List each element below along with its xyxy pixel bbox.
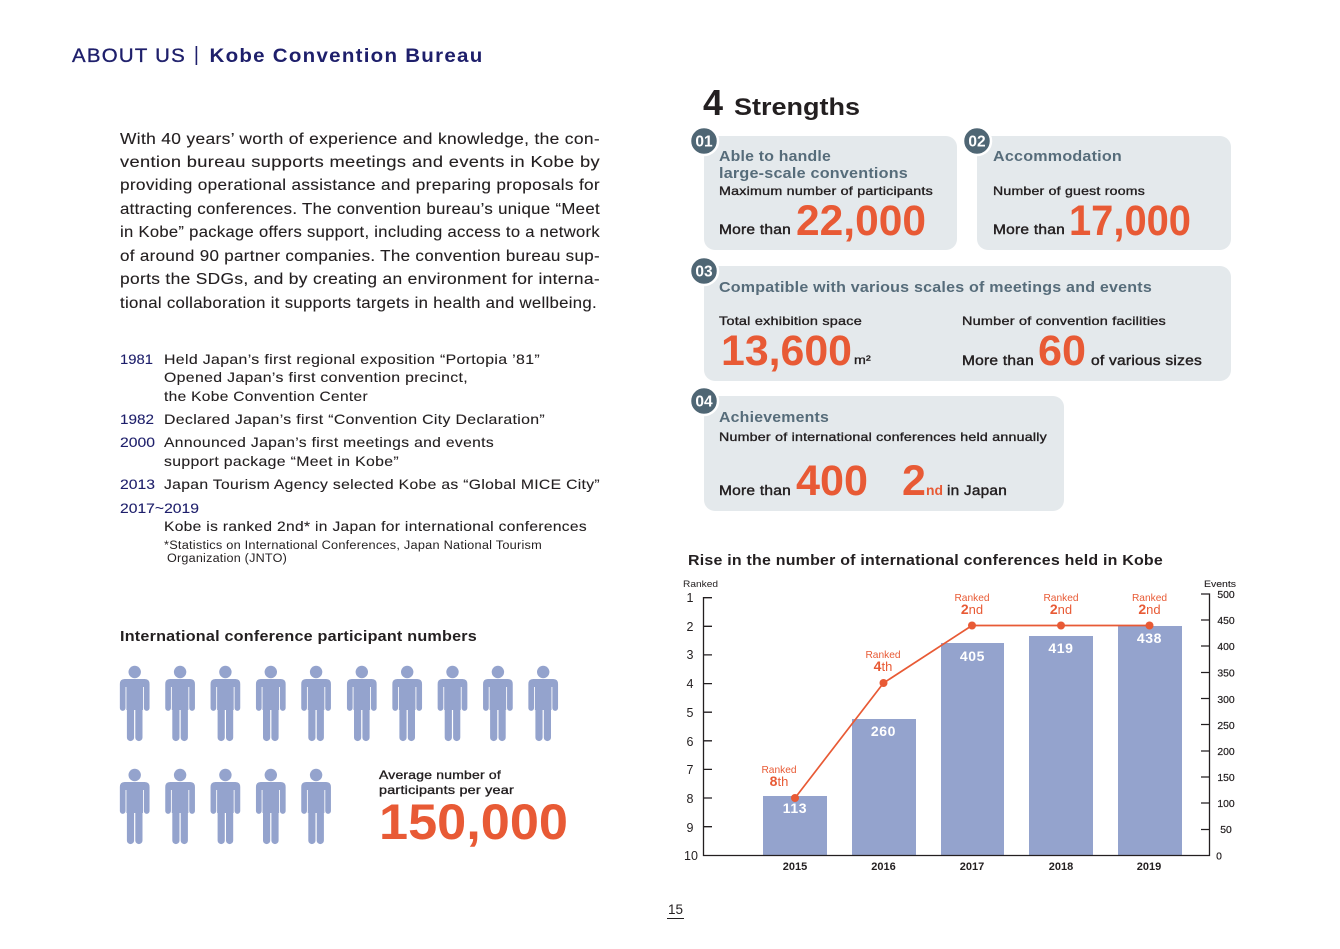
year labels: 2017: [960, 861, 984, 873]
left axis labels: 8: [687, 792, 694, 806]
left axis labels: 9: [687, 821, 694, 835]
left axis labels: 2: [687, 620, 694, 634]
left axis labels: 3: [687, 648, 694, 662]
left axis labels: 7: [687, 763, 694, 777]
right axis labels: 350: [1217, 668, 1235, 680]
timeline: 1982: [120, 411, 154, 427]
text block: introduction: attracting conferences. The convention bureau’s unique “Meet: [120, 201, 600, 218]
heading: 4 Strengths: Strengths: [734, 94, 860, 121]
heading: 4 Strengths: 4: [703, 82, 723, 123]
right axis labels: 150: [1217, 773, 1235, 784]
rank labels: 2nd: [1138, 601, 1161, 617]
title: [72, 45, 484, 67]
bar values: 419: [1048, 640, 1074, 656]
timeline: Kobe is ranked 2nd* in Japan for international conferences: [164, 518, 587, 534]
timeline: 1981: [120, 351, 153, 367]
panel: strength 03: 13,600: [721, 327, 852, 375]
year labels: 2015: [783, 861, 807, 873]
left axis labels: 5: [687, 706, 694, 720]
timeline: Japan Tourism Agency selected Kobe as “Global MICE City”: [164, 476, 600, 492]
right axis labels: 200: [1217, 747, 1235, 758]
rank line: [791, 622, 1154, 802]
panel: strength 03: Compatible with various scales of meetings and events: [719, 280, 1152, 296]
panel: strength 03: Number of convention facilities: [962, 314, 1166, 328]
rank labels: 2nd: [1050, 601, 1072, 617]
year labels: 2019: [1137, 861, 1161, 873]
right axis labels: 400: [1217, 642, 1235, 653]
panel: strength 02: 17,000: [1069, 197, 1191, 245]
bar chart: international conferences: [683, 578, 1236, 873]
right axis labels: 450: [1217, 616, 1235, 627]
timeline: 2013: [120, 476, 155, 492]
text block: introduction: With 40 years’ worth of experience and knowledge, the con-: [120, 131, 600, 148]
panel: strength 03: m²: [854, 353, 871, 367]
panel: strength 04: 04: [695, 394, 713, 410]
panel: strength 02: Number of guest rooms: [993, 184, 1145, 198]
timeline: the Kobe Convention Center: [164, 388, 368, 404]
rank labels: Ranked: [1043, 593, 1079, 604]
panel: strength 01: Able to handle: [719, 149, 831, 165]
panel: strength 01: More than: [719, 222, 791, 237]
panel: strength 04: 2: [902, 457, 926, 505]
year labels: 2016: [871, 861, 896, 873]
timeline: Held Japan’s first regional exposition “Portopia ’81”: [164, 351, 540, 367]
timeline: [120, 351, 600, 565]
timeline: *Statistics on International Conferences, Japan National Tourism: [164, 540, 542, 552]
timeline: Announced Japan’s first meetings and events: [164, 434, 494, 450]
timeline: 2017~2019: [120, 500, 199, 516]
panel: strength 04: Achievements: [719, 410, 829, 426]
bar values: 113: [783, 800, 807, 816]
right axis labels: 300: [1217, 695, 1235, 706]
left axis labels: 6: [687, 735, 694, 749]
text block: introduction: in Kobe” package offers support, including access to a network: [120, 224, 600, 241]
bar values: 405: [960, 648, 985, 664]
right axis labels: Events: [1204, 578, 1236, 589]
panel: strength 01: 01: [695, 134, 713, 150]
panel: strength 01: 22,000: [796, 197, 926, 245]
pictogram: people row 2: [120, 769, 331, 844]
year labels: [783, 861, 1161, 873]
bar values: [783, 630, 1162, 816]
rank labels: 2nd: [961, 601, 983, 617]
panel: strength 04: More than: [719, 483, 791, 498]
panel: strength 04: 400: [796, 457, 868, 505]
rank labels: Ranked: [954, 593, 990, 604]
title: Kobe Convention Bureau: [210, 45, 484, 67]
panel: strength 03: 03: [695, 264, 713, 280]
callout: average participants: [379, 768, 568, 850]
panel: strength 03: Total exhibition space: [719, 314, 862, 328]
callout: average participants: participants per year: [379, 783, 514, 797]
title: ABOUT US: [72, 45, 186, 67]
text block: introduction: tional collaboration it supports targets in health and wellbeing.: [120, 295, 597, 312]
year labels: 2018: [1049, 861, 1073, 873]
panel: strength 03: More than: [962, 353, 1034, 368]
rank labels: Ranked: [761, 765, 797, 776]
panel: strength 03: of various sizes: [1091, 353, 1202, 368]
right axis labels: 100: [1217, 799, 1235, 810]
bar values: 438: [1137, 630, 1162, 646]
panel: strength 01: Maximum number of participants: [719, 184, 933, 198]
panel: strength 03: 60: [1038, 327, 1086, 375]
timeline: Organization (JNTO): [167, 553, 287, 565]
timeline: 2000: [120, 434, 155, 450]
heading: chart title: Rise in the number of international conferences held in Kobe: [688, 553, 1163, 569]
left axis labels: [683, 578, 718, 863]
text block: introduction: [120, 131, 600, 312]
rank labels: 8th: [770, 773, 788, 789]
right axis labels: [1204, 578, 1236, 862]
right axis labels: 250: [1217, 721, 1235, 732]
right axis labels: 50: [1220, 825, 1232, 836]
rank labels: [761, 593, 1167, 789]
left axis labels: 4: [687, 677, 694, 691]
left axis labels: Ranked: [683, 578, 718, 589]
bars: [763, 626, 1182, 856]
panel: strength 01: [690, 127, 957, 250]
heading: 4 Strengths: [703, 82, 860, 123]
panel: strength 04: nd: [926, 483, 943, 498]
callout: average participants: Average number of: [379, 768, 502, 782]
heading: participant numbers: International conference participant numbers: [120, 629, 477, 645]
panel: strength 02: 02: [968, 134, 986, 150]
page number: 15: [668, 902, 683, 917]
right axis labels: 0: [1216, 852, 1222, 862]
axes: [704, 594, 1210, 856]
right axis labels: 500: [1217, 590, 1235, 601]
text block: introduction: of around 90 partner companies. The convention bureau sup-: [120, 248, 600, 265]
panel: strength 03: [690, 257, 1231, 381]
panel: strength 02: Accommodation: [993, 149, 1122, 165]
text block: introduction: vention bureau supports meetings and events in Kobe by: [120, 154, 600, 171]
panel: strength 02: [963, 127, 1231, 250]
bar values: 260: [871, 723, 896, 739]
callout: average participants: 150,000: [379, 794, 568, 850]
panel: strength 04: Number of international conferences held annually: [719, 430, 1047, 444]
panel: strength 02: More than: [993, 222, 1065, 237]
panel: strength 04: in Japan: [947, 483, 1007, 498]
panel: strength 04: [690, 387, 1064, 511]
left axis labels: 10: [684, 849, 698, 863]
text block: introduction: ports the SDGs, and by creating an environment for interna-: [120, 271, 600, 288]
pictogram: people row 1: [120, 666, 558, 741]
timeline: support package “Meet in Kobe”: [164, 453, 399, 469]
rank labels: Ranked: [1132, 593, 1167, 604]
left axis labels: 1: [687, 591, 694, 605]
timeline: Opened Japan’s first convention precinct,: [164, 369, 468, 385]
text block: introduction: providing operational assistance and preparing proposals for: [120, 177, 600, 194]
rank labels: Ranked: [865, 650, 901, 661]
rank labels: 4th: [874, 658, 892, 674]
panel: strength 01: large-scale conventions: [719, 166, 908, 182]
timeline: Declared Japan’s first “Convention City Declaration”: [164, 411, 545, 427]
